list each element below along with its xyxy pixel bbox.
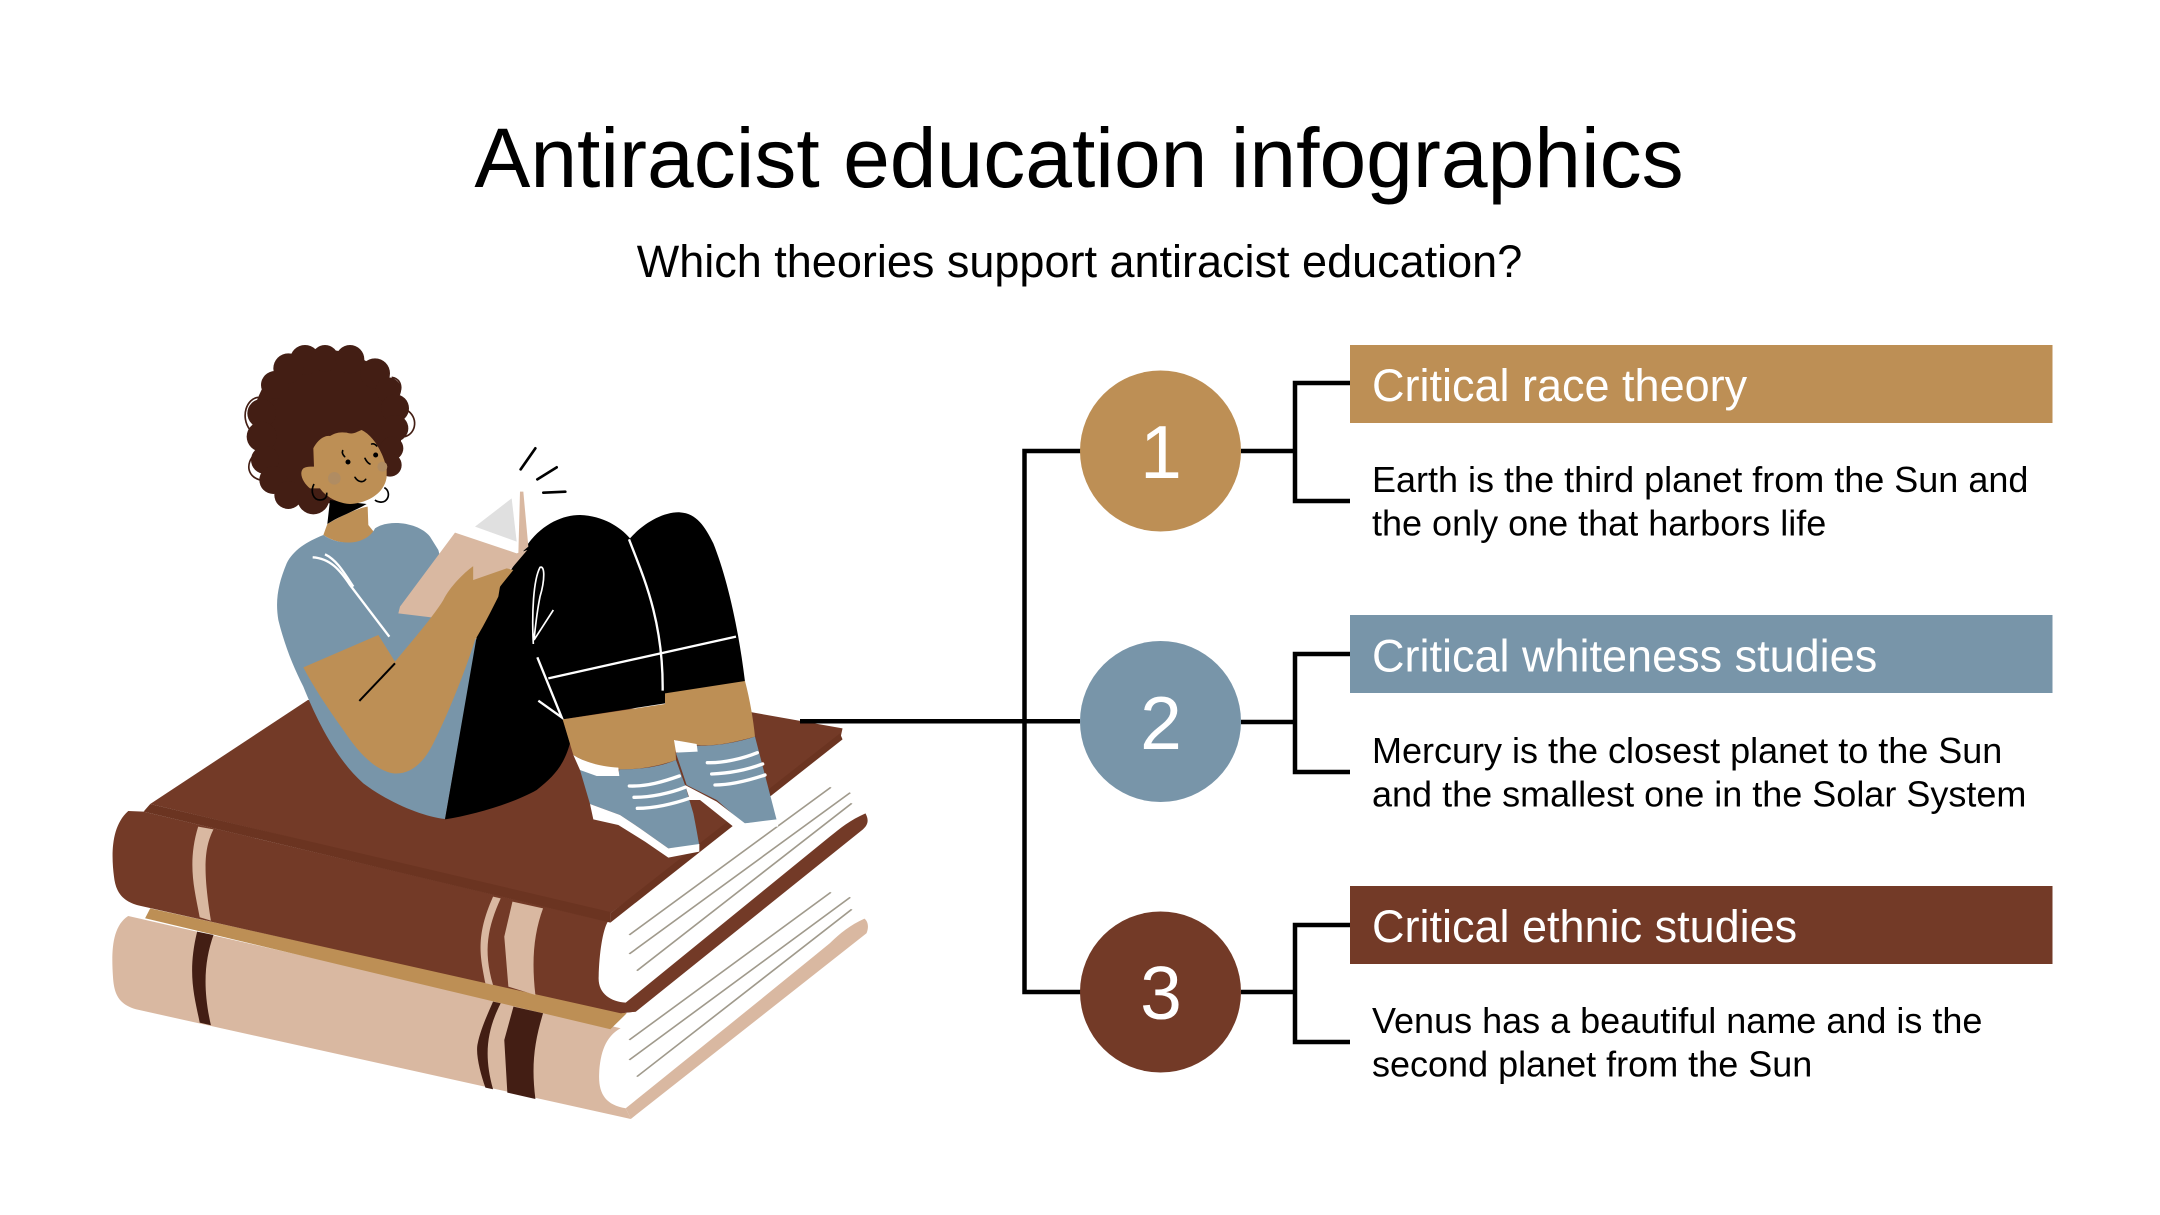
item 2 heading: Critical whiteness studies — [1372, 630, 1877, 682]
far shoe — [676, 737, 777, 823]
illustration: stacked books — [112, 700, 868, 1119]
subtitle: Which theories support antiracist education? — [637, 236, 1522, 287]
face — [301, 430, 387, 504]
item 3 circle: 3 — [1140, 951, 1182, 1035]
neck — [323, 507, 375, 543]
item 2 circle — [1080, 641, 1241, 802]
illustration: person reading — [245, 345, 778, 858]
item 2 circle: 2 — [1140, 681, 1182, 765]
book spine — [518, 492, 528, 555]
lower legs — [563, 681, 755, 769]
bottom book — [112, 892, 868, 1119]
item 3 heading: Critical ethnic studies — [1372, 901, 1797, 952]
item 3 circle — [1080, 912, 1241, 1072]
shirt — [277, 523, 477, 819]
open book and arm — [303, 448, 565, 773]
upper body and head — [245, 345, 477, 819]
shorts lines — [533, 539, 736, 717]
near shoe — [580, 760, 699, 848]
item 3 description: Venus has a beautiful name and is the — [1372, 1000, 1982, 1041]
elbow line — [359, 663, 395, 701]
item 2 heading — [1350, 615, 2052, 693]
hair — [247, 345, 409, 514]
connector tree — [1024, 383, 1350, 1042]
item 1 circle — [1080, 370, 1241, 532]
item 3 heading — [1350, 886, 2052, 964]
item 1 description: the only one that harbors life — [1372, 502, 1826, 544]
sleeve lines — [313, 554, 389, 637]
title: Antiracist education infographics — [474, 111, 1684, 205]
legs and shoes — [445, 512, 778, 858]
hair curls — [245, 377, 415, 481]
item 1 description: Earth is the third planet from the Sun and — [1372, 459, 2028, 500]
cheeks — [328, 462, 387, 485]
item 1 heading: Critical race theory — [1372, 360, 1748, 411]
illustration: connector from books — [800, 719, 1080, 724]
book cover — [398, 533, 527, 618]
facial features — [342, 444, 377, 482]
item 3 description: second planet from the Sun — [1372, 1044, 1812, 1084]
item 2 description: and the smallest one in the Solar System — [1372, 774, 2026, 814]
action lines — [521, 448, 565, 493]
top book — [113, 700, 868, 1013]
item 1 circle: 1 — [1140, 410, 1182, 494]
earrings — [312, 484, 388, 502]
book page — [475, 498, 517, 542]
item 2 description: Mercury is the closest planet to the Sun — [1372, 730, 2002, 771]
arm — [303, 566, 513, 773]
item 1 heading — [1350, 345, 2052, 423]
